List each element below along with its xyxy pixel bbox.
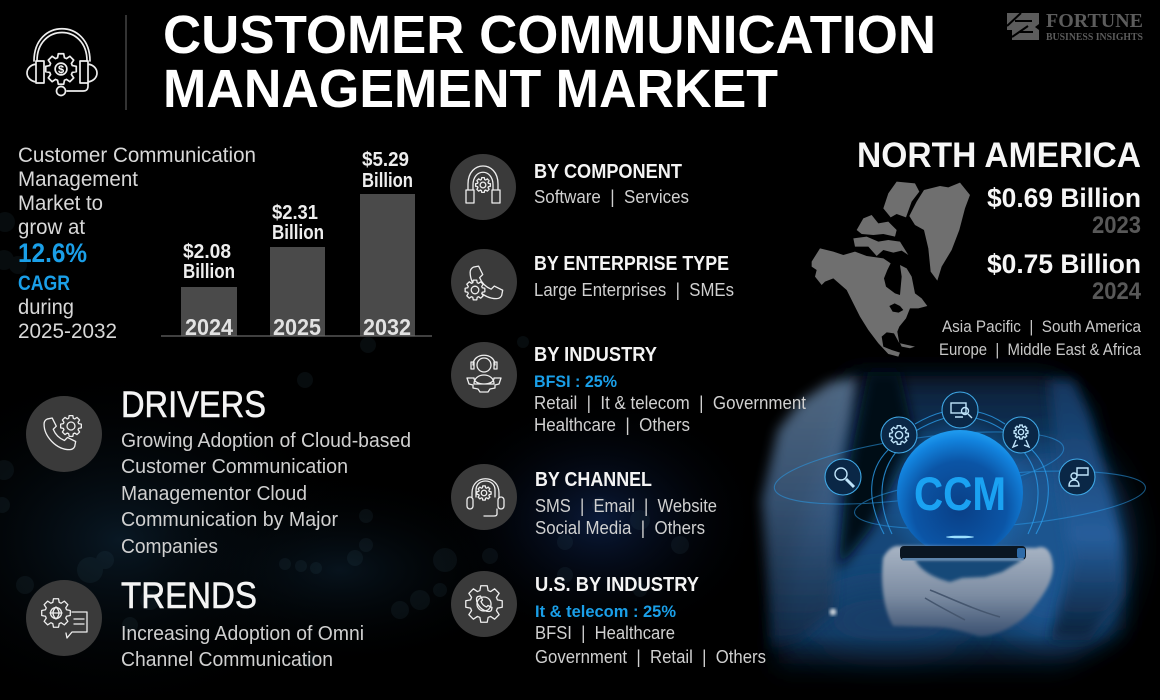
suit: [740, 372, 1160, 700]
other regions: [939, 318, 1142, 359]
bar chart: [161, 149, 432, 340]
hero image: hand holding phone with CCM hologram: [740, 372, 1160, 700]
icon: gear with phone: [466, 586, 502, 622]
title: CUSTOMER COMMUNICATION: [163, 5, 936, 65]
panel: North America values: $0.75 Billion: [987, 249, 1141, 279]
panel: North America values: $0.69 Billion: [987, 183, 1141, 213]
bar chart: $5.29: [362, 149, 409, 171]
segment: by channel: [451, 464, 717, 538]
bar chart: 2032: [363, 314, 411, 340]
segment: by enterprise type: BY ENTERPRISE TYPE: [534, 253, 729, 275]
title: [163, 5, 936, 119]
icon: headset with dollar gear: [27, 29, 97, 96]
icon: globe gear with chat bubble: [42, 599, 87, 638]
panel: North America values: 2024: [1092, 278, 1142, 305]
CCM label: CCM: [914, 467, 1006, 520]
panel: North America values: NORTH AMERICA: [857, 136, 1141, 175]
segment: by channel: SMS | Email | Website: [535, 496, 717, 516]
panel: North America values: 2023: [1092, 212, 1141, 239]
segment: by enterprise type: Large Enterprises | SMEs: [534, 280, 734, 300]
segment: by industry: Retail | It & telecom | Government: [534, 393, 806, 413]
icon: headphones with gear: [466, 166, 500, 203]
segment: by industry: BY INDUSTRY: [534, 344, 658, 366]
panel: drivers: Communication by Major: [121, 509, 338, 531]
logo: Fortune Business Insights: BUSINESS INSIGHTS: [1046, 32, 1143, 43]
segment: U.S. by industry: U.S. BY INDUSTRY: [535, 574, 700, 596]
hologram arcs: [872, 412, 1048, 534]
icon: phone and gear: [465, 266, 503, 300]
background glow and bokeh: [0, 212, 770, 700]
bar chart: Billion: [362, 170, 413, 192]
bar chart: 2025: [273, 314, 321, 340]
CAGR text block: CAGR: [18, 272, 70, 295]
segment: U.S. by industry: Government | Retail | Others: [535, 647, 766, 667]
icon: headset with dollar gear: $: [58, 64, 64, 76]
hologram icons: [825, 392, 1095, 495]
segment: U.S. by industry: BFSI | Healthcare: [535, 623, 675, 643]
phone: [900, 546, 1026, 560]
title: MANAGEMENT MARKET: [163, 59, 778, 119]
segment: by component: [450, 154, 689, 220]
CAGR text block: Market to: [18, 192, 103, 215]
other regions: Europe | Middle East & Africa: [939, 341, 1142, 359]
panel: drivers: Customer Communication: [121, 456, 348, 478]
logo: Fortune Business Insights: FORTUNE: [1046, 10, 1143, 32]
map: North America: [812, 182, 970, 357]
logo: Fortune Business Insights: [1007, 10, 1143, 43]
segment: by industry: [451, 342, 806, 435]
bar chart: $2.31: [272, 202, 318, 224]
segment: by channel: Social Media | Others: [535, 518, 705, 538]
CAGR text block: Customer Communication: [18, 144, 256, 167]
panel: trends: Channel Communication: [121, 649, 333, 671]
bar chart: Billion: [272, 222, 324, 244]
panel: trends: [26, 575, 364, 671]
icon: headset with gear: [467, 479, 504, 516]
segment: U.S. by industry: [451, 571, 766, 667]
segment: U.S. by industry: It & telecom : 25%: [535, 602, 676, 621]
panel: drivers: [26, 384, 411, 558]
hand: [882, 546, 1053, 636]
CAGR text block: 12.6%: [18, 238, 87, 268]
panel: trends: TRENDS: [121, 575, 257, 616]
segment: by industry: Healthcare | Others: [534, 415, 690, 435]
icon: agent on gear: [467, 355, 501, 392]
bar chart: Billion: [183, 261, 235, 283]
bar chart: 2024: [185, 314, 233, 340]
segment: by channel: BY CHANNEL: [535, 469, 652, 491]
CAGR text block: grow at: [18, 216, 85, 239]
segment: by component: Software | Services: [534, 187, 689, 207]
segment: by component: BY COMPONENT: [534, 161, 682, 183]
panel: drivers: Growing Adoption of Cloud-based: [121, 430, 411, 452]
CAGR text block: Management: [18, 168, 138, 191]
panel: drivers: Companies: [121, 536, 218, 558]
panel: drivers: Managementor Cloud: [121, 483, 307, 505]
panel: North America values: [857, 136, 1142, 305]
hologram orbit rings: [770, 418, 1148, 539]
other regions: Asia Pacific | South America: [942, 318, 1142, 336]
CAGR text block: 2025-2032: [18, 320, 117, 343]
CAGR text block: during: [18, 296, 74, 319]
segment: by industry: BFSI : 25%: [534, 372, 617, 391]
panel: trends: Increasing Adoption of Omni: [121, 623, 364, 645]
panel: drivers: DRIVERS: [121, 384, 266, 425]
segment: by enterprise type: [451, 249, 734, 315]
CAGR text block: [18, 144, 256, 343]
bar chart: $2.08: [183, 241, 231, 263]
icon: phone and gear: [44, 416, 81, 450]
hologram globe: [882, 415, 1038, 571]
